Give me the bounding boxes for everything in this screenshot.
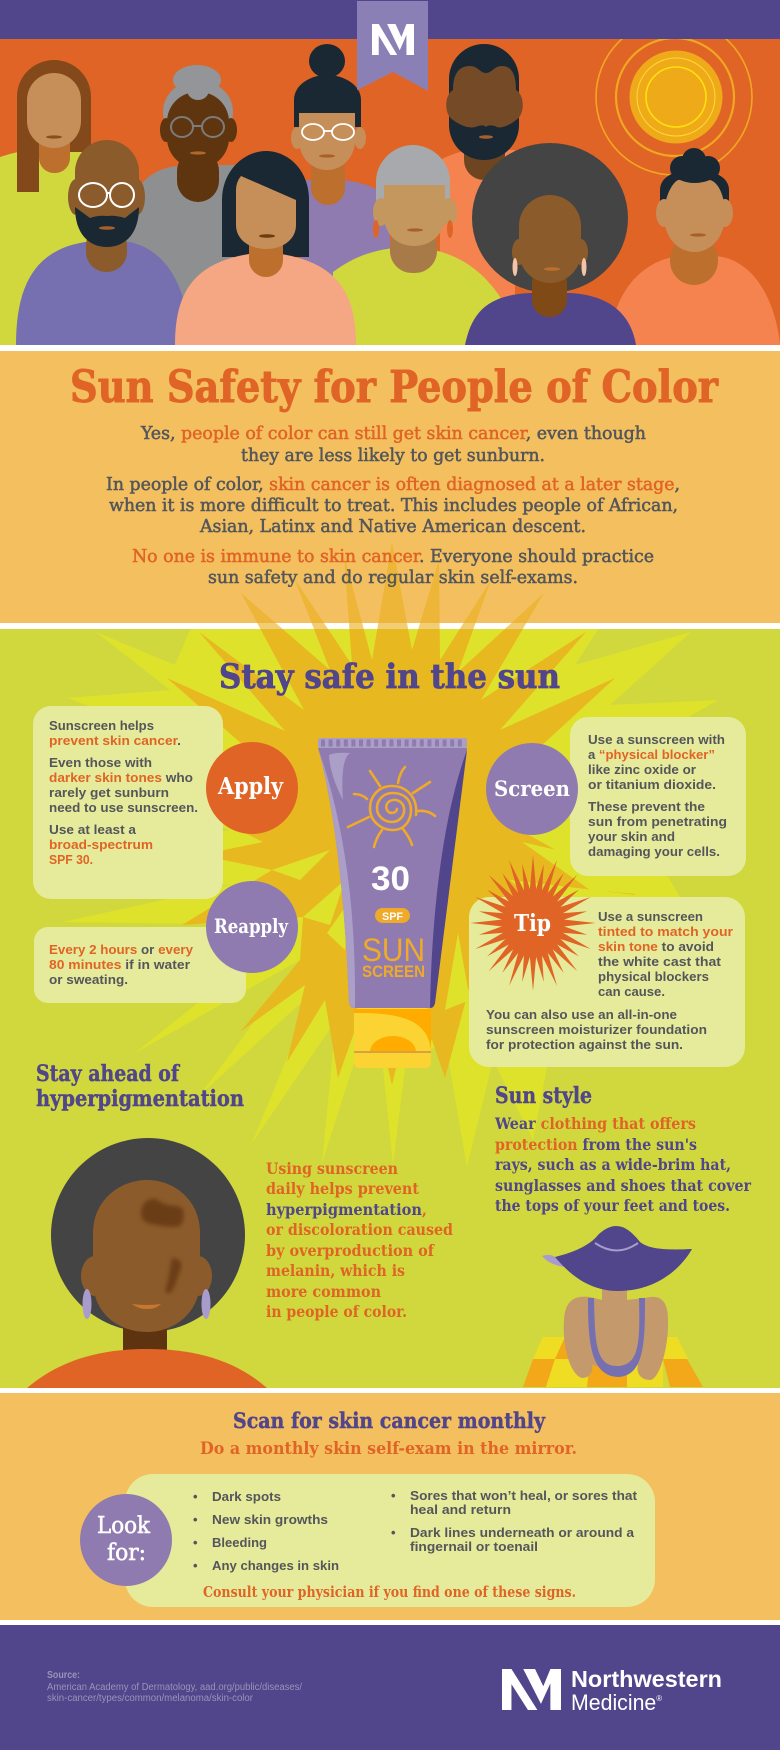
subheading: self exam: Do a monthly skin self-exam in the mirror. [200, 1439, 577, 1459]
heading: hyperpigmentation: hyperpigmentation [36, 1086, 244, 1112]
callout: screen text box: your skin and [588, 829, 675, 844]
text: sun style: Wear clothing that offers [494, 1114, 696, 1133]
text: hyperpigmentation: by overproduction of [266, 1241, 435, 1260]
badge: reapply: Reapply [214, 914, 288, 938]
tube sun icon [348, 767, 435, 847]
checklist right: fingernail or toenail [410, 1539, 538, 1554]
checklist right: • [391, 1488, 396, 1503]
tube label sun screen: SUN [362, 932, 425, 968]
text: sun style: the tops of your feet and toes. [495, 1196, 730, 1215]
person: long dark hair, peach shirt [175, 151, 356, 345]
heading: scan: Scan for skin cancer monthly [233, 1408, 546, 1433]
callout: apply text box: Use at least a [49, 822, 137, 837]
callout: apply text box: broad-spectrum [49, 837, 153, 852]
badge: apply: Apply [217, 773, 284, 800]
callout: tip text box: tinted to match your [598, 924, 733, 939]
text: sun style: protection from the sun's [495, 1135, 697, 1154]
text: sun style [494, 1114, 751, 1215]
tube SPF pill [375, 908, 410, 923]
callout: tip text box: can cause. [598, 984, 665, 999]
icon: sunscreen tube [318, 738, 467, 1068]
person: top knot, white glasses, lavender shirt [291, 44, 390, 300]
text: hyperpigmentation: more common [266, 1282, 382, 1301]
intro paragraph 2: Asian, Latinx and Native American descent. [199, 516, 586, 537]
callout: screen text box [570, 717, 746, 876]
callout: reapply text box: or sweating. [49, 972, 128, 987]
text: sun style: rays, such as a wide-brim hat, [495, 1155, 731, 1174]
callout: tip text box: sunscreen moisturizer foundation [486, 1022, 707, 1037]
ribbon with logo [357, 1, 428, 91]
callout: tip text box: Use a sunscreen [598, 909, 703, 924]
checklist right [391, 1488, 638, 1554]
heading: stay safe: Stay safe in the sun [219, 657, 560, 697]
text: hyperpigmentation: hyperpigmentation, [266, 1200, 427, 1219]
callout: tip text box: the white cast that [598, 954, 722, 969]
checklist left: Any changes in skin [212, 1558, 339, 1573]
callout: apply text box: SPF 30. [49, 852, 93, 867]
person: afro, purple shirt [465, 143, 636, 345]
badge: screen [486, 743, 578, 835]
body [564, 1285, 668, 1380]
person: grey bob hair, orange earrings, lime shirt [333, 145, 510, 345]
tube label 30: 30 [371, 860, 410, 898]
tube cap [354, 1008, 431, 1068]
source [47, 1670, 302, 1704]
badge: tip starburst: Tip [514, 910, 551, 937]
panel: scan monthly [0, 1393, 780, 1620]
callout: apply text box: prevent skin cancer . [49, 733, 181, 748]
logo: Northwestern Medicine: Northwestern [571, 1666, 722, 1692]
panel: intro [0, 351, 780, 629]
badge: look for: Look [97, 1513, 150, 1539]
callout: reapply text box [34, 927, 246, 1003]
intro paragraph 1 [140, 423, 646, 466]
intro paragraph 3: sun safety and do regular skin self-exams. [208, 567, 578, 588]
text: hyperpigmentation: Using sunscreen [266, 1159, 399, 1178]
intro paragraph 2: In people of color, skin cancer is often diagnosed at a later stage , [106, 474, 680, 495]
text: sun style: sunglasses and shoes that cover [495, 1176, 751, 1195]
heading: hyperpigmentation [36, 1061, 244, 1112]
logo: Northwestern Medicine: Medicine [571, 1690, 659, 1715]
consult note: Consult your physician if you find one of these signs. [203, 1583, 576, 1601]
callout: apply text box: Even those with [49, 755, 152, 770]
checklist left: • [193, 1558, 198, 1573]
callout: screen text box: or titanium dioxide. [588, 777, 716, 792]
checklist right: • [391, 1525, 396, 1540]
callout: apply text box [33, 706, 223, 899]
intro paragraph 1: they are less likely to get sunburn. [241, 445, 545, 466]
text: hyperpigmentation [266, 1159, 453, 1321]
look for box [125, 1474, 655, 1607]
badge: look for: for: [107, 1540, 146, 1566]
tube label sun screen: SCREEN [362, 962, 425, 981]
logo: Northwestern Medicine [502, 1666, 722, 1715]
text: hyperpigmentation: in people of color. [266, 1302, 407, 1321]
checklist left: Dark spots [212, 1489, 281, 1504]
callout: screen text box: These prevent the [588, 799, 705, 814]
title: Sun Safety for People of Color [70, 362, 719, 413]
intro paragraph 1: Yes, people of color can still get skin cancer , even though [140, 423, 646, 444]
badge: look for [80, 1494, 172, 1586]
callout: apply text box: rarely get sunburn [49, 785, 169, 800]
callout: screen text box: Use a sunscreen with [588, 732, 725, 747]
callout: tip text box: physical blockers [598, 969, 709, 984]
tube crimp [318, 738, 467, 748]
callout: tip text box: You can also use an all-in-one [486, 1007, 677, 1022]
rays reaching into intro panel [241, 542, 544, 629]
checklist left: • [193, 1489, 198, 1504]
swimsuit [588, 1298, 645, 1377]
illustration: group of people with sun [0, 19, 780, 345]
checklist left: • [193, 1512, 198, 1527]
source: skin-cancer/types/common/melanoma/skin-color [47, 1693, 254, 1704]
hat [542, 1226, 692, 1291]
callout: screen text box: like zinc oxide or [588, 762, 696, 777]
callout: screen text box: damaging your cells. [588, 844, 720, 859]
text: hyperpigmentation: daily helps prevent [266, 1179, 419, 1198]
tube body [318, 748, 467, 1008]
tube label sun screen [362, 932, 425, 981]
checklist right: Dark lines underneath or around a [410, 1525, 635, 1540]
intro paragraph 3 [132, 546, 654, 588]
intro paragraph 2 [106, 474, 680, 537]
towel [523, 1337, 703, 1387]
checklist right: heal and return [410, 1502, 511, 1517]
heading: hyperpigmentation: Stay ahead of [36, 1061, 180, 1087]
person: top bun, salmon shirt [609, 148, 780, 345]
callout: apply text box: need to use sunscreen. [49, 800, 198, 815]
callout: reapply text box: 80 minutes if in water [49, 957, 190, 972]
illustration: woman in wide-brim hat on towel [523, 1226, 703, 1387]
callout: reapply text box: Every 2 hours or every [49, 942, 194, 957]
callout: screen text box: a “physical blocker” [588, 747, 715, 762]
sun rays background [64, 629, 718, 1166]
icon: sun [595, 39, 753, 176]
checklist left [193, 1489, 339, 1573]
intro paragraph 3: No one is immune to skin cancer . Everyone should practice [132, 546, 654, 567]
badge: tip starburst [470, 855, 596, 991]
source: American Academy of Dermatology, aad.org/public/diseases/ [47, 1682, 302, 1693]
illustration: woman with hyperpigmentation [27, 1138, 267, 1388]
callout: tip text box: for protection against the sun. [486, 1037, 683, 1052]
text: hyperpigmentation: or discoloration caused [266, 1220, 453, 1239]
callout: screen text box: sun from penetrating [588, 814, 727, 829]
callout: apply text box: darker skin tones who [49, 770, 193, 785]
callout: apply text box: Sunscreen helps [49, 718, 154, 733]
badge: apply [206, 742, 298, 834]
checklist right: Sores that won’t heal, or sores that [410, 1488, 638, 1503]
badge: reapply [206, 881, 298, 973]
checklist left: Bleeding [212, 1535, 267, 1550]
footer [0, 1625, 780, 1750]
panel: stay safe in the sun [0, 629, 780, 1388]
person: beard, salmon shirt [440, 44, 523, 300]
checklist left: • [193, 1535, 198, 1550]
heading: sun style: Sun style [495, 1083, 592, 1109]
badge: screen: Screen [494, 776, 570, 801]
person: long brown hair, lime shirt [0, 60, 95, 345]
top purple band [0, 0, 780, 39]
checklist left: New skin growths [212, 1512, 328, 1527]
callout: tip text box [469, 897, 745, 1067]
source: Source: [47, 1670, 80, 1681]
text: hyperpigmentation: melanin, which is [266, 1261, 405, 1280]
person: bald, white glasses, dark beard, periwinkle shirt [16, 140, 189, 345]
tube SPF pill: SPF [382, 911, 403, 923]
person: grey hair bun, glasses, grey shirt [126, 65, 237, 298]
intro paragraph 2: when it is more difficult to treat. This includes people of African, [109, 495, 678, 516]
logo: Northwestern Medicine: ® [656, 1694, 662, 1703]
callout: tip text box: skin tone to avoid [598, 939, 714, 954]
